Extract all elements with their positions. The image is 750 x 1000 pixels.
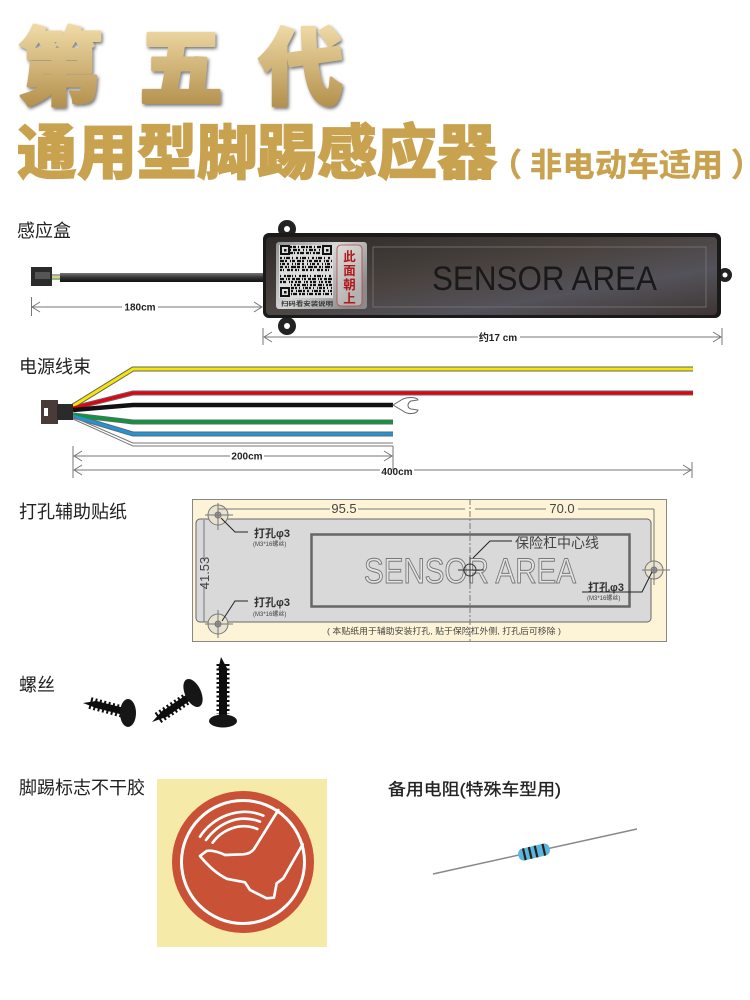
callouts: 保险杠中心线: [515, 535, 599, 551]
label: 螺丝: 螺丝: [19, 675, 55, 695]
sensor housing: [263, 220, 732, 335]
section: foot kick sticker: [19, 778, 327, 947]
screw 3: [209, 657, 237, 728]
wires: [73, 369, 693, 446]
dimensions: 200cm and 400cm: [73, 446, 692, 478]
connector and cable: [31, 267, 264, 286]
label: 打孔辅助贴纸: 打孔辅助贴纸: [19, 502, 127, 522]
yellow sticker background: [157, 779, 327, 947]
callouts: (M3*16螺丝): [253, 610, 286, 618]
red notice: 此面朝上: 面: [343, 264, 356, 278]
dimensions: [197, 501, 654, 622]
callouts: [253, 526, 624, 618]
resistor: [433, 829, 637, 874]
mounting holes: [205, 503, 670, 638]
label: 感应盒: 感应盒: [17, 221, 71, 241]
outlined SENSOR AREA text: SENSOR AREA: [364, 552, 577, 591]
sticker drawing: [192, 499, 670, 642]
section: spare resistor: [388, 780, 637, 874]
QR caption: 扫码看安装说明: [281, 300, 333, 308]
callouts: (M3*16螺丝): [587, 594, 620, 602]
dimensions: 95.5: [331, 501, 357, 516]
dimensions: 200cm and 400cm: 200cm: [231, 452, 263, 462]
red notice: 此面朝上: 此: [343, 249, 356, 264]
callouts: (M3*16螺丝): [253, 540, 286, 548]
dimensions: 41.53: [197, 557, 212, 589]
section: screws: [19, 657, 237, 728]
dimension: 180cm: 180cm: [124, 302, 156, 314]
QR code: [279, 245, 333, 298]
ring terminal: [393, 397, 418, 414]
sticker note: ( 本贴纸用于辅助安装打孔, 贴于保险杠外侧, 打孔后可移除 ): [327, 626, 561, 636]
section: sensor box: [17, 220, 732, 345]
section: wire harness: [19, 357, 693, 478]
red notice: 此面朝上: [337, 245, 362, 306]
label: 脚踢标志不干胶: 脚踢标志不干胶: [19, 778, 145, 798]
dimension: 约17 cm: [263, 328, 722, 345]
subtitle: 通用型脚踢感应器: 通用型脚踢感应器: [17, 120, 497, 187]
sensor area text: SENSOR AREA: [432, 260, 657, 298]
dimension: 约17 cm: 约17 cm: [479, 331, 517, 344]
label: 电源线束: 电源线束: [19, 357, 91, 377]
callouts: 打孔φ3: [254, 526, 290, 540]
dimensions: 70.0: [549, 501, 575, 516]
title: 第五代: 第五代: [18, 22, 343, 116]
red badge with foot icon: [172, 791, 314, 933]
leader lines: [221, 518, 652, 621]
callouts: 打孔φ3: [254, 595, 290, 609]
screw 2: [152, 676, 207, 722]
silver label: [276, 242, 367, 309]
label: 备用电阻(特殊车型用): 备用电阻(特殊车型用): [388, 780, 561, 799]
red notice: 此面朝上: 朝: [343, 277, 356, 292]
dimension: 180cm: [32, 297, 262, 316]
section: drilling sticker: [19, 499, 670, 642]
dimensions: 200cm and 400cm: 400cm: [381, 467, 413, 478]
centre line and crosshair: [469, 499, 471, 642]
harness connector: [41, 400, 73, 424]
screw 1: [83, 699, 136, 727]
red notice: 此面朝上: 上: [343, 292, 356, 306]
callouts: 打孔φ3: [588, 580, 624, 594]
